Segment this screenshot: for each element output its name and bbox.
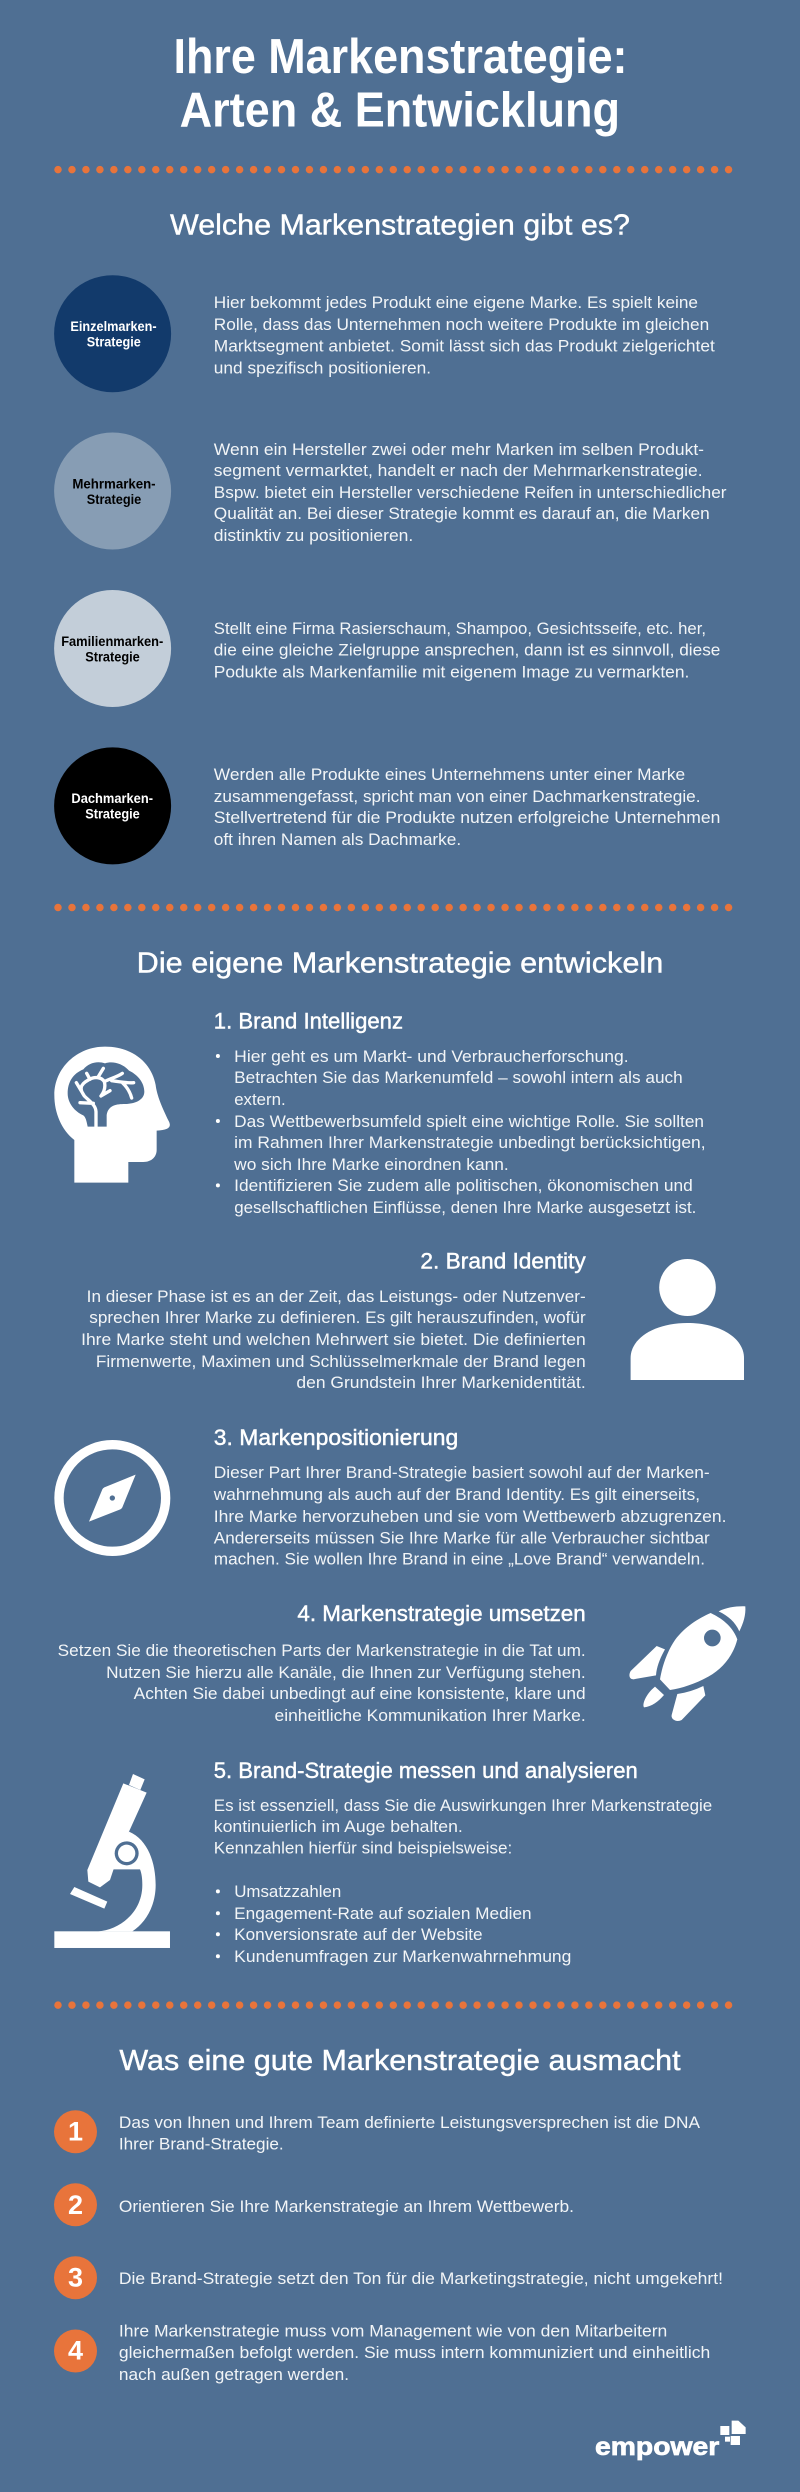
panel: step 4 Markenstrategie umsetzen xyxy=(58,1601,745,1725)
bullet list: step 1: im Rahmen Ihrer Markenstrategie unbedingt berücksichtigen, xyxy=(234,1133,706,1152)
text block: Mehrmarken description: Wenn ein Hersteller zwei oder mehr Marken im selben Produkt- xyxy=(214,440,704,459)
text block: item 4: nach außen getragen werden. xyxy=(119,2365,349,2384)
text block: step 2: Firmenwerte, Maximen und Schlüsselmerkmale der Brand legen xyxy=(96,1352,586,1371)
circle badge: Mehrmarken: Strategie xyxy=(87,492,142,507)
panel: step 2 Brand Identity xyxy=(81,1248,744,1392)
text block: step 3: wahrnehmung als auch auf der Brand Identity. Es gilt einerseits, xyxy=(213,1485,700,1504)
text block: Mehrmarken description: distinktiv zu positionieren. xyxy=(214,526,413,545)
circle badge: Mehrmarken: Mehrmarken- xyxy=(72,476,156,491)
text block: step 2: In dieser Phase ist es an der Zeit, das Leistungs- oder Nutzenver- xyxy=(87,1287,586,1306)
heading: step 1: 1. Brand Intelligenz xyxy=(214,1008,403,1033)
text block: Familienmarken description xyxy=(214,619,720,681)
text block: step 2: den Grundstein Ihrer Markenidentität. xyxy=(296,1373,586,1392)
circle badge: Dachmarken: Dachmarken- xyxy=(71,791,153,806)
heading: step 4: 4. Markenstrategie umsetzen xyxy=(297,1601,586,1626)
panel: Mehrmarken-Strategie xyxy=(54,432,727,550)
number badge 1: 1 xyxy=(68,2116,83,2146)
text block: Dachmarken description: zusammengefasst, spricht man von einer Dachmarkenstrategie. xyxy=(214,787,701,806)
text block: step 5: kontinuierlich im Auge behalten. xyxy=(214,1817,463,1836)
bullet list: step 1: extern. xyxy=(234,1090,286,1109)
circle badge: Familienmarken xyxy=(54,590,171,707)
text block: step 3 xyxy=(213,1463,727,1569)
circle badge: Einzelmarken: Strategie xyxy=(87,334,141,349)
circle badge: Dachmarken: Strategie xyxy=(85,806,140,822)
circle badge: Einzelmarken: Einzelmarken- xyxy=(70,319,157,334)
bullet list: step 1: gesellschaftlichen Einflüsse, denen Ihre Marke ausgesetzt ist. xyxy=(234,1198,696,1217)
title xyxy=(174,30,628,138)
circle badge: Dachmarken xyxy=(54,747,171,864)
logo: empower: empower xyxy=(595,2433,720,2461)
bullet list: step 5: Kundenumfragen zur Markenwahrnehmung xyxy=(234,1947,571,1966)
list item 2 xyxy=(54,2183,574,2226)
panel: Einzelmarken-Strategie xyxy=(54,275,715,392)
panel: step 5 Brand-Strategie messen xyxy=(54,1758,712,1966)
text block: Mehrmarken description xyxy=(214,440,727,545)
bullet list: step 1: Hier geht es um Markt- und Verbraucherforschung. xyxy=(234,1047,629,1066)
heading: step 5: 5. Brand-Strategie messen und analysieren xyxy=(214,1758,638,1783)
bullet list: step 1: Das Wettbewerbsumfeld spielt eine wichtige Rolle. Sie sollten xyxy=(234,1112,704,1131)
text block: step 2: sprechen Ihrer Marke zu definieren. Es gilt herauszufinden, wofür xyxy=(89,1308,586,1327)
text block: Einzelmarken description: Marktsegment anbietet. Somit lässt sich das Produkt zielgerichtet xyxy=(214,336,715,356)
text block: item 3: Die Brand-Strategie setzt den Ton für die Marketingstrategie, nicht umgekehrt! xyxy=(119,2269,723,2288)
number badge 2 xyxy=(54,2183,97,2226)
text block: Mehrmarken description: Bspw. bietet ein Hersteller verschiedene Reifen in unterschiedlicher xyxy=(214,483,727,502)
text block: step 5: Kennzahlen hierfür sind beispielsweise: xyxy=(214,1839,512,1858)
bullet list: step 1: Identifizieren Sie zudem alle politischen, ökonomischen und xyxy=(234,1176,693,1195)
list item 1 xyxy=(54,2110,701,2153)
panel: step 3 Markenpositionierung xyxy=(59,1425,727,1569)
heading: step 2: 2. Brand Identity xyxy=(420,1248,586,1274)
circle badge: Mehrmarken xyxy=(54,432,171,550)
text block: Familienmarken description: Podukte als Markenfamilie mit eigenem Image zu vermarkten. xyxy=(214,662,689,681)
text block: step 4 xyxy=(58,1641,586,1725)
text block: step 3: machen. Sie wollen Ihre Brand in eine „Love Brand“ verwandeln. xyxy=(214,1550,705,1569)
bullet list: step 5 xyxy=(216,1882,571,1966)
list item 3 xyxy=(54,2256,723,2299)
logo: empower xyxy=(595,2421,746,2461)
icon: compass xyxy=(59,1445,166,1551)
icon: microscope xyxy=(54,1774,170,1948)
panel: step 1 Brand Intelligenz xyxy=(54,1008,706,1217)
heading: step 3: 3. Markenpositionierung xyxy=(214,1425,458,1450)
circle badge: Familienmarken: Familienmarken- xyxy=(61,634,163,649)
text block: item 4: Ihre Markenstrategie muss vom Management wie von den Mitarbeitern xyxy=(119,2321,667,2340)
number badge 3: 3 xyxy=(68,2262,83,2292)
text block: Familienmarken description: Stellt eine Firma Rasierschaum, Shampoo, Gesichtsseife, etc. her, xyxy=(214,619,706,638)
text block: item 4 xyxy=(119,2321,710,2384)
text block: Mehrmarken description: segment vermarktet, handelt er nach der Mehrmarkenstrategie. xyxy=(214,461,703,480)
text block: step 4: Setzen Sie die theoretischen Parts der Markenstrategie in die Tat um. xyxy=(58,1641,586,1660)
text block: Dachmarken description: oft ihren Namen als Dachmarke. xyxy=(214,830,461,849)
text block: step 4: Nutzen Sie hierzu alle Kanäle, die Ihnen zur Verfügung stehen. xyxy=(106,1663,586,1682)
text block: item 1 xyxy=(119,2113,701,2153)
panel: Dachmarken-Strategie xyxy=(54,747,720,864)
text block: step 5 xyxy=(214,1796,712,1858)
bullet list: step 5: Umsatzzahlen xyxy=(234,1882,341,1901)
bullet list: step 5: Konversionsrate auf der Website xyxy=(234,1925,483,1944)
heading: what makes a good strategy: Was eine gute Markenstrategie ausmacht xyxy=(119,2045,681,2077)
text block: Einzelmarken description: Rolle, dass das Unternehmen noch weitere Produkte im gleichen xyxy=(214,315,709,334)
text block: Dachmarken description: Werden alle Produkte eines Unternehmens unter einer Marke xyxy=(214,765,685,784)
number badge 4: 4 xyxy=(68,2336,83,2366)
text block: step 3: Andererseits müssen Sie Ihre Marke für alle Verbraucher sichtbar xyxy=(214,1528,710,1547)
bullet list: step 1: wo sich Ihre Marke einordnen kann. xyxy=(233,1155,509,1174)
list item 4 xyxy=(54,2321,710,2384)
circle badge: Familienmarken: Strategie xyxy=(85,650,140,664)
circle badge: Einzelmarken xyxy=(54,275,171,392)
icon: person xyxy=(631,1259,744,1380)
text block: item 2: Orientieren Sie Ihre Markenstrategie an Ihrem Wettbewerb. xyxy=(119,2197,574,2216)
text block: step 3: Ihre Marke hervorzuheben und sie vom Wettbewerb abzugrenzen. xyxy=(214,1507,727,1526)
text block: item 1: Das von Ihnen und Ihrem Team definierte Leistungsversprechen ist die DNA xyxy=(119,2113,701,2132)
text block: Dachmarken description: Stellvertretend für die Produkte nutzen erfolgreiche Unternehmen xyxy=(214,808,720,827)
panel: Familienmarken-Strategie xyxy=(54,590,720,707)
bullet list: step 1: Betrachten Sie das Markenumfeld – sowohl intern als auch xyxy=(234,1068,683,1087)
text block: Dachmarken description xyxy=(214,765,720,849)
text block: Mehrmarken description: Qualität an. Bei dieser Strategie kommt es darauf an, die Marken xyxy=(214,504,710,523)
text block: step 2: Ihre Marke steht und welchen Mehrwert sie bietet. Die definierten xyxy=(81,1330,586,1349)
text block: item 4: gleichermaßen befolgt werden. Sie muss intern kommuniziert und einheitlich xyxy=(119,2343,710,2362)
heading: types of strategies: Welche Markenstrategien gibt es? xyxy=(170,210,630,242)
text block: Einzelmarken description: Hier bekommt jedes Produkt eine eigene Marke. Es spielt keine xyxy=(214,293,698,312)
number badge 1 xyxy=(54,2110,97,2153)
text block: step 4: einheitliche Kommunikation Ihrer Marke. xyxy=(274,1706,586,1725)
bullet list: step 5: Engagement-Rate auf sozialen Medien xyxy=(234,1904,532,1923)
text block: Einzelmarken description: und spezifisch positionieren. xyxy=(214,358,431,377)
number badge 3 xyxy=(54,2256,97,2299)
text block: step 3: Dieser Part Ihrer Brand-Strategie basiert sowohl auf der Marken- xyxy=(214,1463,710,1482)
text block: step 2 xyxy=(81,1287,586,1392)
text block: step 4: Achten Sie dabei unbedingt auf eine konsistente, klare und xyxy=(134,1684,586,1703)
icon: rocket xyxy=(629,1606,745,1721)
icon: head with brain xyxy=(54,1047,170,1183)
text block: item 1: Ihrer Brand-Strategie. xyxy=(119,2134,284,2153)
text block: step 5: Es ist essenziell, dass Sie die Auswirkungen Ihrer Markenstrategie xyxy=(214,1796,712,1815)
text block: Familienmarken description: die eine gleiche Zielgruppe ansprechen, dann ist es sinnvoll, diese xyxy=(214,641,720,660)
text block: Einzelmarken description xyxy=(214,293,715,377)
heading: develop your own strategy: Die eigene Markenstrategie entwickeln xyxy=(137,948,663,980)
bullet list: step 1 xyxy=(216,1047,706,1217)
number badge 4 xyxy=(54,2330,97,2372)
title: Ihre Markenstrategie: xyxy=(174,30,628,84)
title: Arten & Entwicklung xyxy=(180,84,620,138)
number badge 2: 2 xyxy=(68,2190,83,2220)
